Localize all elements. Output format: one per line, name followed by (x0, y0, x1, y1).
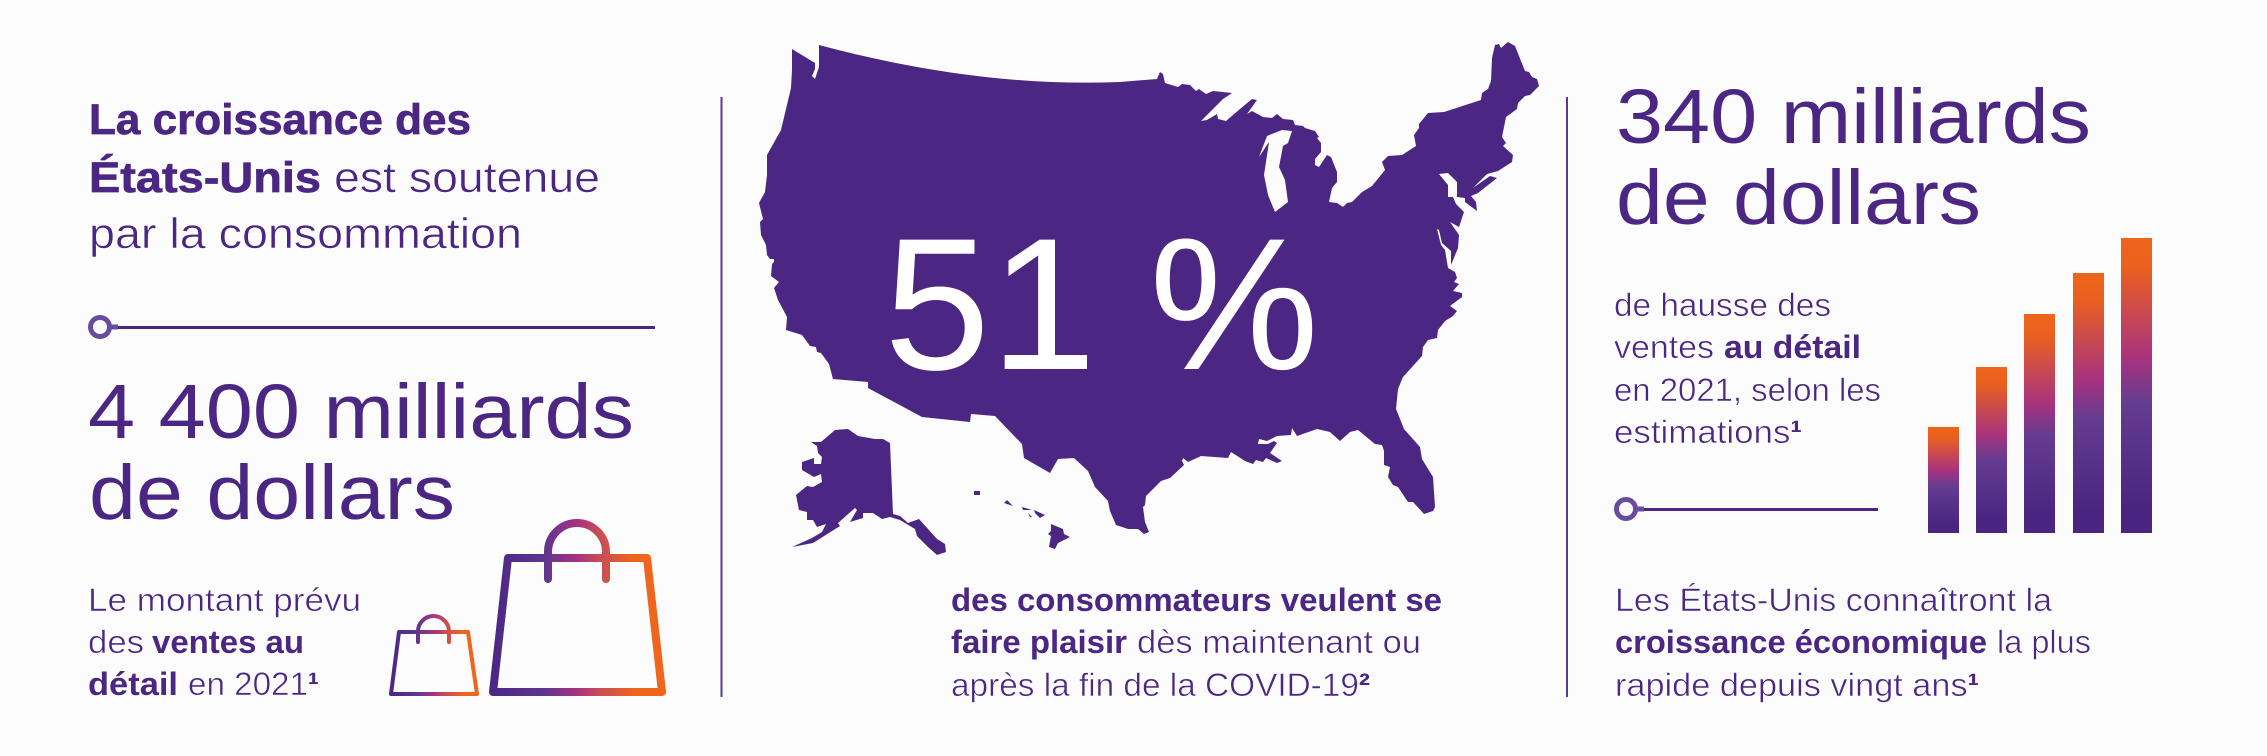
big number: 4 400 milliards de dollars: de dollars (89, 450, 455, 536)
heading: growth supported by consumption: États-Unis (89, 154, 321, 202)
big number: 4 400 milliards de dollars (88, 369, 634, 536)
big number: 340 milliards de dollars (1616, 74, 2091, 241)
text: retail sales increase: en 2021, selon les (1614, 372, 1881, 408)
divider: left (720, 97, 722, 697)
map: contiguous states (759, 42, 1539, 534)
text: consumers want to treat themselves: faire plaisir (951, 624, 1127, 660)
text: fastest growth in twenty years: rapide depuis vingt ans ¹ (1615, 667, 1979, 703)
icon: large shopping bag (493, 523, 662, 692)
text: consumers want to treat themselves: dès maintenant ou (1137, 624, 1421, 660)
text: consumers want to treat themselves: après la fin de la COVID-19 ² (951, 667, 1370, 703)
text: fastest growth in twenty years: Les États-Unis connaîtront la (1615, 582, 2052, 618)
text: planned retail sales (88, 582, 361, 702)
text: retail sales increase (1614, 287, 1881, 450)
big number: 51 %: 51 % (884, 199, 1319, 409)
text: retail sales increase: estimations ¹ (1614, 414, 1802, 450)
text: fastest growth in twenty years: croissance économique (1615, 624, 1987, 660)
text: planned retail sales: détail (88, 666, 178, 702)
map: Hawaii (974, 491, 1070, 549)
heading: growth supported by consumption: La croissance des (89, 96, 471, 144)
icon: small shopping bag (391, 616, 477, 694)
text: planned retail sales: en 2021¹ (188, 666, 319, 702)
text: planned retail sales: Le montant prévu (88, 582, 361, 618)
big number: 340 milliards de dollars: 340 milliards (1616, 74, 2091, 160)
timeline marker: right (1616, 500, 1878, 518)
text: consumers want to treat themselves (951, 582, 1442, 703)
text: fastest growth in twenty years: la plus (1997, 624, 2091, 660)
big number: 340 milliards de dollars: de dollars (1616, 155, 1981, 241)
heading: growth supported by consumption (89, 96, 600, 258)
text: planned retail sales: ventes au (152, 624, 304, 660)
divider: right (1566, 97, 1568, 697)
map: Alaska (792, 429, 946, 555)
map: United States (759, 42, 1539, 555)
heading: growth supported by consumption: est soutenue (334, 154, 600, 202)
text: retail sales increase: ventes (1614, 329, 1714, 365)
text: consumers want to treat themselves: des consommateurs veulent se (951, 582, 1442, 618)
panel: left column (88, 96, 662, 702)
timeline marker: left (90, 318, 655, 336)
panel: right column (1614, 74, 2152, 703)
text: fastest growth in twenty years (1615, 582, 2091, 703)
text: planned retail sales: des (88, 624, 144, 660)
heading: growth supported by consumption: par la consommation (89, 210, 522, 258)
bar chart: rising sales (1928, 238, 2152, 533)
text: retail sales increase: de hausse des (1614, 287, 1831, 323)
text: retail sales increase: au détail (1724, 329, 1861, 365)
big number: 4 400 milliards de dollars: 4 400 milliards (88, 369, 634, 455)
panel: centre column (759, 42, 1539, 703)
